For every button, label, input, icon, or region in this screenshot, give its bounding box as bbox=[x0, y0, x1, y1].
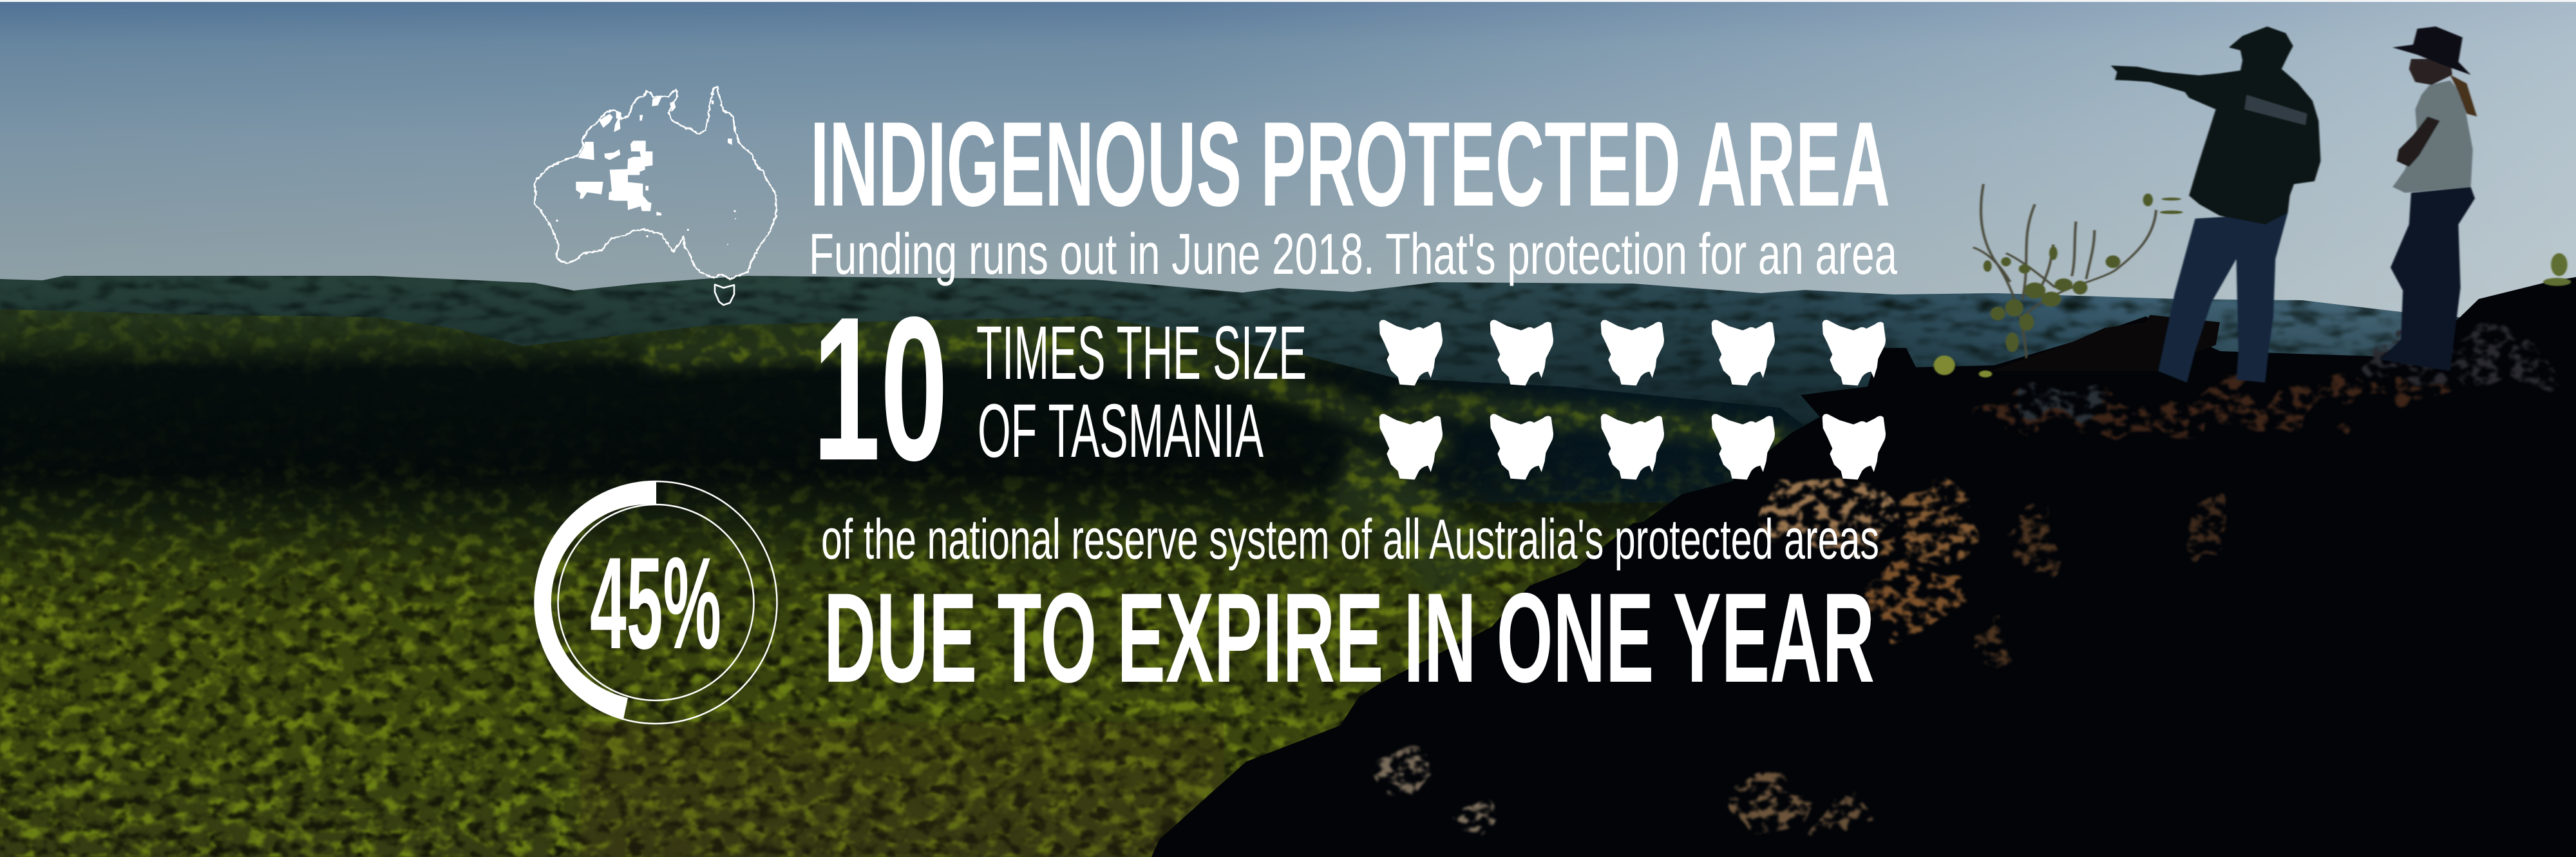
description line: of the national reserve system of all Australia's protected areas bbox=[821, 507, 1879, 571]
donut chart: 45 percent bbox=[535, 481, 777, 724]
label line two: OF TASMANIA bbox=[978, 389, 1264, 474]
subtitle: Funding runs out in June 2018. That's protection for an area bbox=[809, 222, 1898, 287]
Tasmania outline bbox=[715, 285, 734, 305]
outer ring bbox=[535, 481, 777, 724]
woman in hat bbox=[2380, 26, 2477, 371]
cool shadow over the right valley bbox=[1419, 380, 1803, 503]
inner ring bbox=[558, 505, 753, 700]
rocky outcrop silhouette bbox=[1151, 277, 2576, 857]
sky bbox=[0, 0, 2576, 322]
right edge shrub bbox=[2543, 253, 2571, 286]
icon grid: ten Tasmania silhouettes bbox=[1379, 320, 1886, 479]
percentage value: 45% bbox=[590, 530, 721, 677]
big number 10: 10 bbox=[813, 274, 948, 503]
thick 45 percent arc bbox=[535, 481, 656, 719]
tree canopy texture bbox=[0, 309, 1793, 857]
statistic: 10 times the size of Tasmania bbox=[813, 274, 1307, 503]
icon: map of Australia with protected areas bbox=[535, 87, 776, 305]
mainland outline bbox=[535, 87, 776, 279]
sunlit rock patches bbox=[1385, 331, 2557, 847]
brown scrub tint low in the forest bbox=[580, 722, 1224, 857]
protected area blocks bbox=[556, 95, 736, 245]
thin white frame edges from the source bbox=[0, 0, 2576, 2]
rock behind the pointing man bbox=[1989, 315, 2220, 371]
label line one: TIMES THE SIZE bbox=[976, 311, 1307, 396]
forested mid ridges and valley bbox=[0, 309, 1803, 857]
man pointing bbox=[2111, 26, 2320, 383]
people and shrubs, drawn in crop coordinates bbox=[1934, 26, 2571, 383]
far hills bbox=[0, 276, 2460, 427]
shrub bbox=[1934, 184, 2183, 378]
